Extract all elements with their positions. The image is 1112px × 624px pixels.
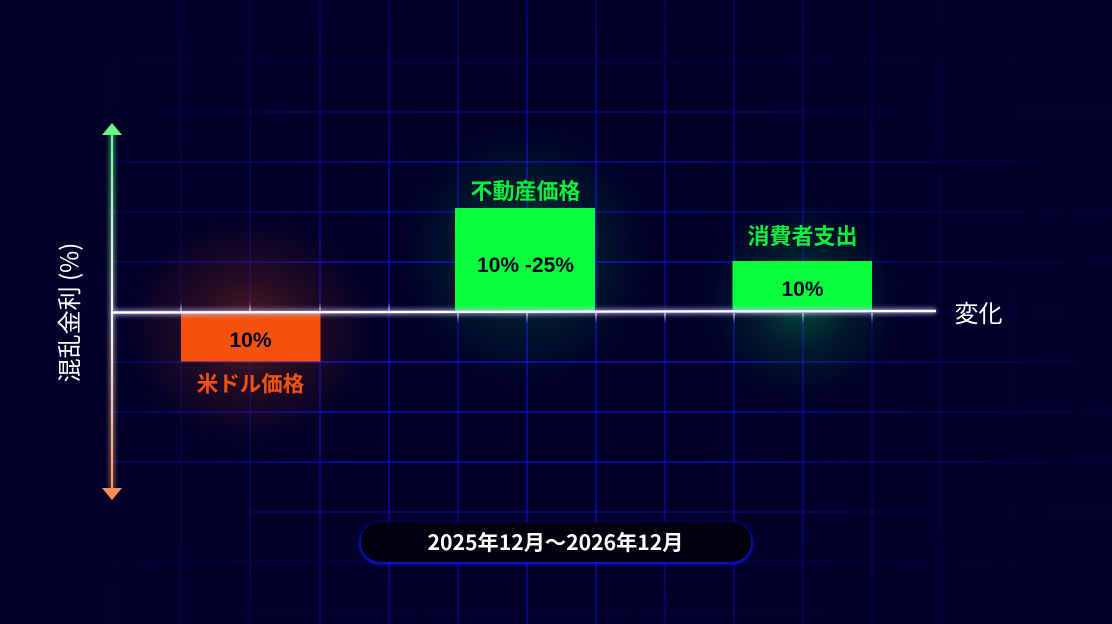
- y-axis title: 混乱金利 (%): [50, 243, 85, 382]
- value: real estate: 10% -25%: [477, 254, 574, 277]
- horizontal axis: [112, 311, 936, 312]
- axis tick glints: [180, 302, 873, 323]
- bar: real estate: [455, 208, 595, 312]
- label: US dollar price: 米ドル価格: [197, 368, 305, 398]
- x-axis title: 変化: [954, 294, 1002, 329]
- label: real estate prices: 不動産価格: [470, 174, 581, 206]
- bar: US dollar: [181, 313, 320, 362]
- bar: consumer spending: [732, 261, 872, 312]
- date pill: 2025年12月～2026年12月: [428, 526, 683, 557]
- value: US dollar: 10%: [229, 329, 272, 352]
- value: consumer spending: 10%: [781, 278, 824, 301]
- vertical axis arrow: [102, 123, 122, 500]
- glow: real estate bar: [401, 125, 651, 385]
- glow: consumer spending bar: [702, 200, 902, 400]
- glow: dollar bar: [125, 215, 375, 445]
- date pill: [360, 522, 752, 564]
- label: consumer spending: 消費者支出: [747, 219, 858, 251]
